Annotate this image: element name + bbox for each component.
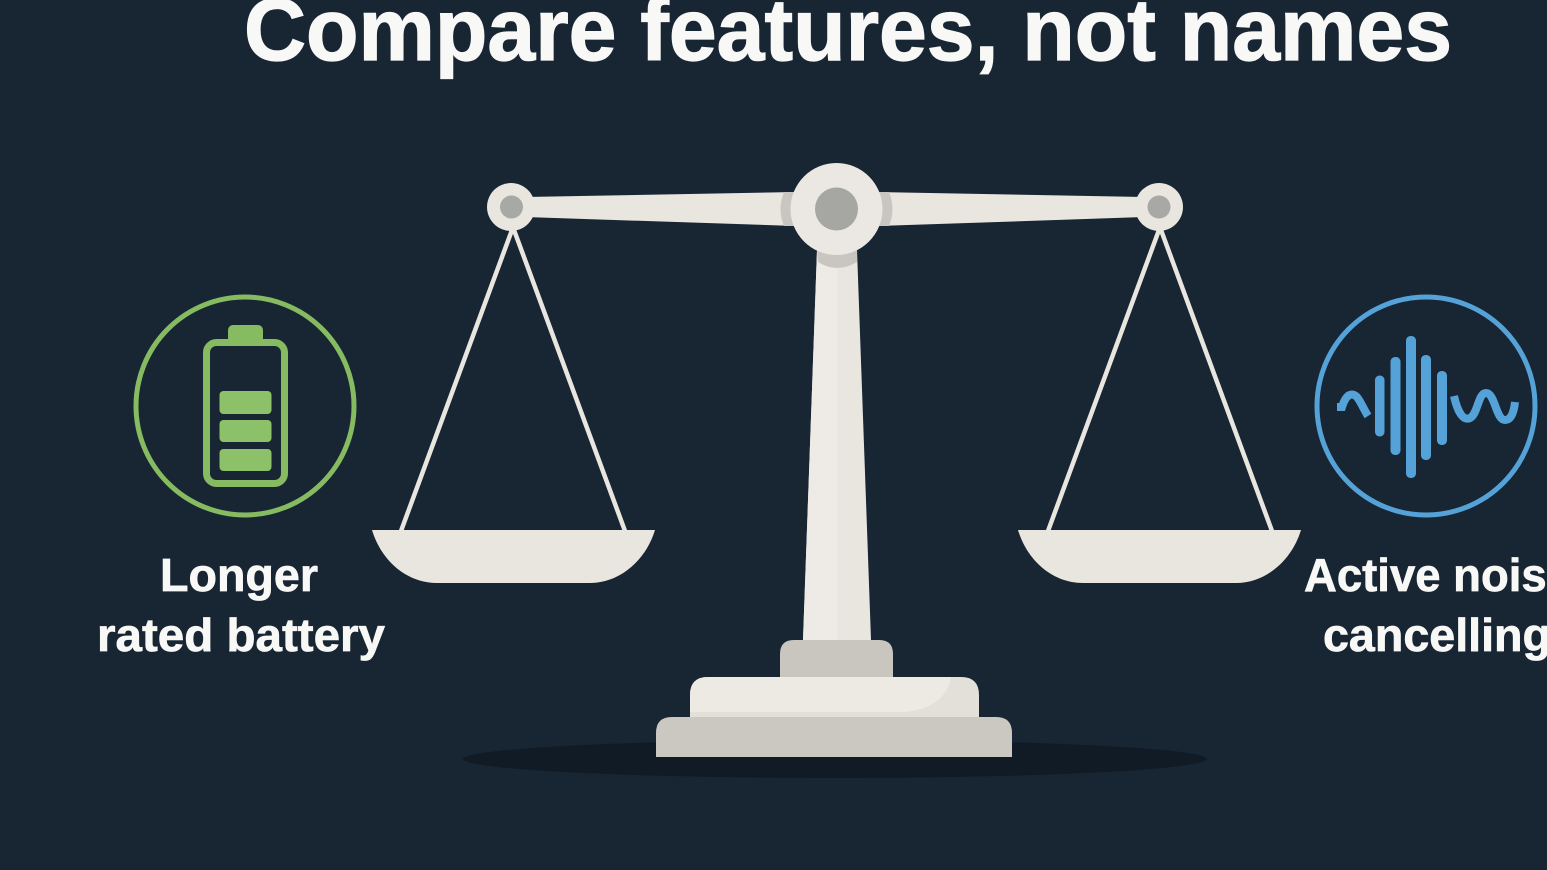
- base top tier: [780, 640, 893, 677]
- base middle tier highlight: [690, 677, 951, 712]
- beam hub shadow: [780, 192, 892, 226]
- icon: noise cancelling sound wave: [1317, 297, 1535, 515]
- left pan strings: [401, 230, 625, 531]
- left pan: [372, 530, 655, 583]
- label: longer rated battery: rated battery: [97, 609, 385, 661]
- label: active noise cancelling: [1304, 549, 1547, 661]
- label: active noise cancelling: cancelling: [1323, 609, 1547, 661]
- icon: battery: [136, 297, 354, 515]
- right pivot: [1135, 183, 1183, 231]
- right pan: [1018, 530, 1301, 583]
- base bottom tier: [656, 717, 1012, 757]
- label: longer rated battery: Longer: [160, 549, 318, 601]
- beam: [525, 192, 1145, 226]
- post highlight: [803, 250, 837, 640]
- left pivot: [487, 183, 535, 231]
- post collar shadow: [817, 250, 857, 268]
- balance scale: [372, 163, 1301, 778]
- post: [803, 250, 871, 640]
- base middle tier: [690, 677, 979, 717]
- right pan strings: [1048, 230, 1272, 531]
- ground shadow: [463, 740, 1207, 778]
- label: longer rated battery: [97, 549, 385, 661]
- centre hub: [790, 163, 882, 255]
